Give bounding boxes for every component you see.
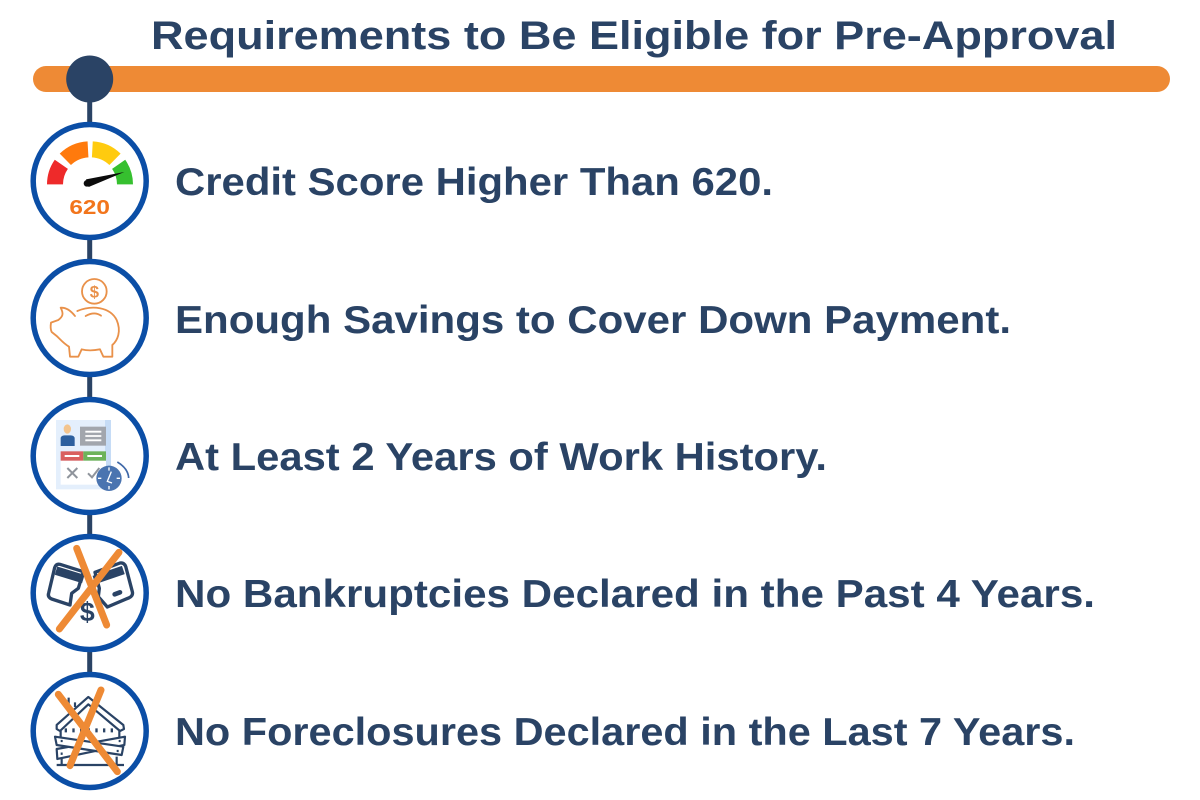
item 1: credit score — [33, 124, 773, 238]
item 4: bankruptcies — [33, 536, 1095, 650]
icon: broken credit cards crossed out — [33, 536, 146, 650]
orange header bar — [33, 66, 1170, 92]
icon: credit score gauge — [33, 124, 146, 238]
timeline start dot — [66, 56, 113, 102]
item 2: savings — [33, 262, 1011, 374]
label: credit score: Credit Score Higher Than 620. — [175, 161, 773, 204]
icon: piggy bank with coin: $ — [90, 282, 100, 301]
icon: credit score gauge: 620 — [69, 197, 110, 219]
title: Requirements to Be Eligible for Pre-Approval — [151, 14, 1117, 58]
label: bankruptcies: No Bankruptcies Declared in the Past 4 Years. — [175, 573, 1095, 616]
icon: piggy bank with coin — [33, 262, 146, 374]
vertical timeline line — [87, 90, 92, 690]
icon: work record and clock — [33, 400, 146, 512]
icon: broken credit cards crossed out: $ — [80, 597, 95, 627]
label: work history: At Least 2 Years of Work History. — [175, 436, 827, 479]
label: savings: Enough Savings to Cover Down Payment. — [175, 299, 1011, 342]
label: foreclosures: No Foreclosures Declared in the Last 7 Years. — [175, 711, 1075, 754]
icon: boarded-up house crossed out — [33, 674, 146, 788]
item 3: work history — [33, 400, 827, 512]
item 5: foreclosures — [33, 674, 1075, 788]
